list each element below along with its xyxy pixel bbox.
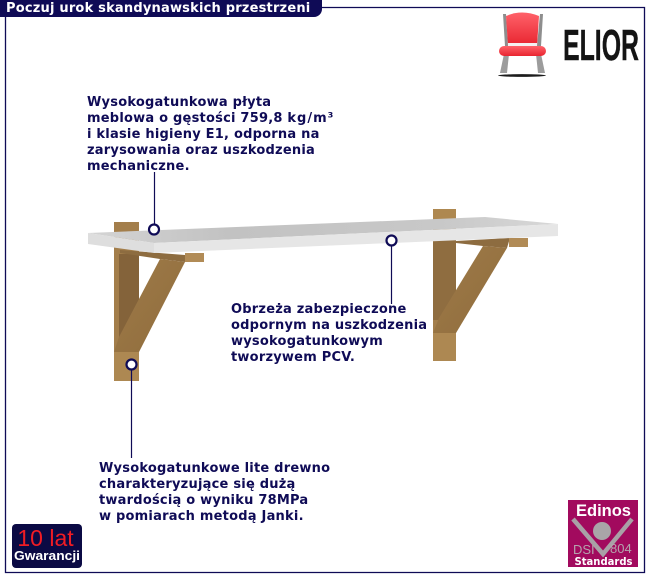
left bracket xyxy=(114,222,204,381)
text: board description: mechaniczne. xyxy=(87,159,190,174)
text: wood description: Wysokogatunkowe lite drewno xyxy=(99,461,330,476)
text: edge description xyxy=(231,302,427,365)
title: Poczuj urok skandynawskich przestrzeni xyxy=(6,1,310,16)
pointer dot: board xyxy=(149,224,159,234)
badge: 10 years warranty xyxy=(12,524,82,568)
text: wood description xyxy=(99,461,330,524)
text: edge description: Obrzeża zabezpieczone xyxy=(231,302,407,317)
text: edge description: tworzywem PCV. xyxy=(231,350,355,365)
pointer line: edge xyxy=(390,245,392,304)
text: board description: meblowa o gęstości 759,8 kg/m³ xyxy=(87,111,334,126)
text: board description xyxy=(87,95,334,174)
text: edge description: odpornym na uszkodzenia xyxy=(231,318,427,333)
pointer line: wood xyxy=(130,370,132,458)
text: wood description: twardością o wyniku 78MPa xyxy=(99,493,308,508)
text: board description: i klasie higieny E1, odporna na xyxy=(87,127,320,142)
text: wood description: charakteryzujące się dużą xyxy=(99,477,296,492)
shelf xyxy=(88,217,558,253)
pointer dot: wood xyxy=(126,360,136,370)
badge: Edinos standards: Edinos xyxy=(576,502,631,520)
badge: 10 years warranty: Gwarancji xyxy=(14,548,80,563)
text: wood description: w pomiarach metodą Janki. xyxy=(99,509,304,524)
pointer line: board xyxy=(154,172,156,224)
badge: Edinos standards xyxy=(568,500,638,568)
badge: 10 years warranty: 10 lat xyxy=(17,525,74,551)
right bracket xyxy=(433,209,528,361)
badge: Edinos standards: DSI xyxy=(573,542,595,557)
badge: Edinos standards: Standards xyxy=(574,555,633,568)
text: board description: Wysokogatunkowa płyta xyxy=(87,95,271,110)
text: edge description: wysokogatunkowym xyxy=(231,334,383,349)
icon: chair xyxy=(498,12,546,77)
pointer dot: edge xyxy=(386,236,396,246)
text: board description: zarysowania oraz uszkodzenia xyxy=(87,143,315,158)
badge: Edinos standards: 804 xyxy=(610,541,632,556)
